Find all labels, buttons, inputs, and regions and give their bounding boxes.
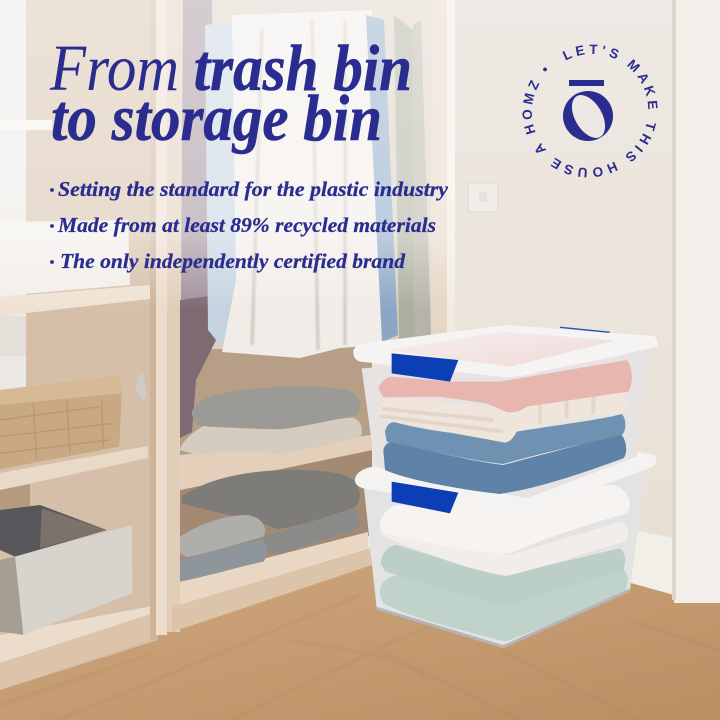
- rear blue handle: [560, 327, 610, 333]
- title: From trash bin: [49, 32, 412, 105]
- baseboard: [620, 528, 674, 595]
- white shirts: [222, 10, 382, 358]
- hinge: [136, 373, 147, 402]
- circular slogan: LET'S MAKE THIS HOUSE A HOMZ •: [522, 44, 658, 178]
- title: to storage bin: [51, 82, 382, 155]
- bullet 1: Setting the standard for the plastic industry: [58, 177, 449, 201]
- title: [49, 32, 412, 155]
- lower bin base edge: [377, 590, 630, 647]
- text wash: [0, 0, 455, 310]
- logo badge: [522, 44, 658, 178]
- door frame: [672, 0, 720, 603]
- bullet 2: Made from at least 89% recycled materials: [57, 213, 436, 237]
- hanging clothes: [180, 0, 431, 438]
- storage bins: [353, 325, 658, 647]
- lower blue handle: [392, 482, 458, 513]
- shelf towels: [180, 386, 362, 582]
- floor: [0, 558, 720, 720]
- shelf uprights: [150, 0, 180, 640]
- lower bin lid: [355, 452, 656, 512]
- grey fabric bin: [0, 505, 133, 635]
- light switch: [468, 183, 498, 212]
- logo bar: [569, 80, 604, 86]
- closet: right bay: [172, 0, 455, 632]
- logo ring: [563, 89, 613, 144]
- wicker basket: [0, 376, 122, 469]
- blue, green and taupe garments: [366, 15, 398, 342]
- upper blue handle: [392, 353, 458, 382]
- fabric bin upper: [0, 220, 130, 296]
- lower bin towels: [379, 485, 630, 642]
- bullet 3: The only independently certified brand: [60, 249, 405, 273]
- plaid shirt: [180, 0, 216, 438]
- wall: [440, 0, 680, 560]
- lid clear panel: [385, 332, 615, 367]
- upper bin lid: [353, 325, 658, 377]
- lower bin body: [364, 473, 645, 647]
- upper bin body: [362, 350, 648, 498]
- bullet list: [50, 177, 449, 273]
- light blue shirt: [205, 20, 245, 345]
- upper bin clothes: [378, 360, 632, 494]
- closet: left bay: [0, 0, 158, 690]
